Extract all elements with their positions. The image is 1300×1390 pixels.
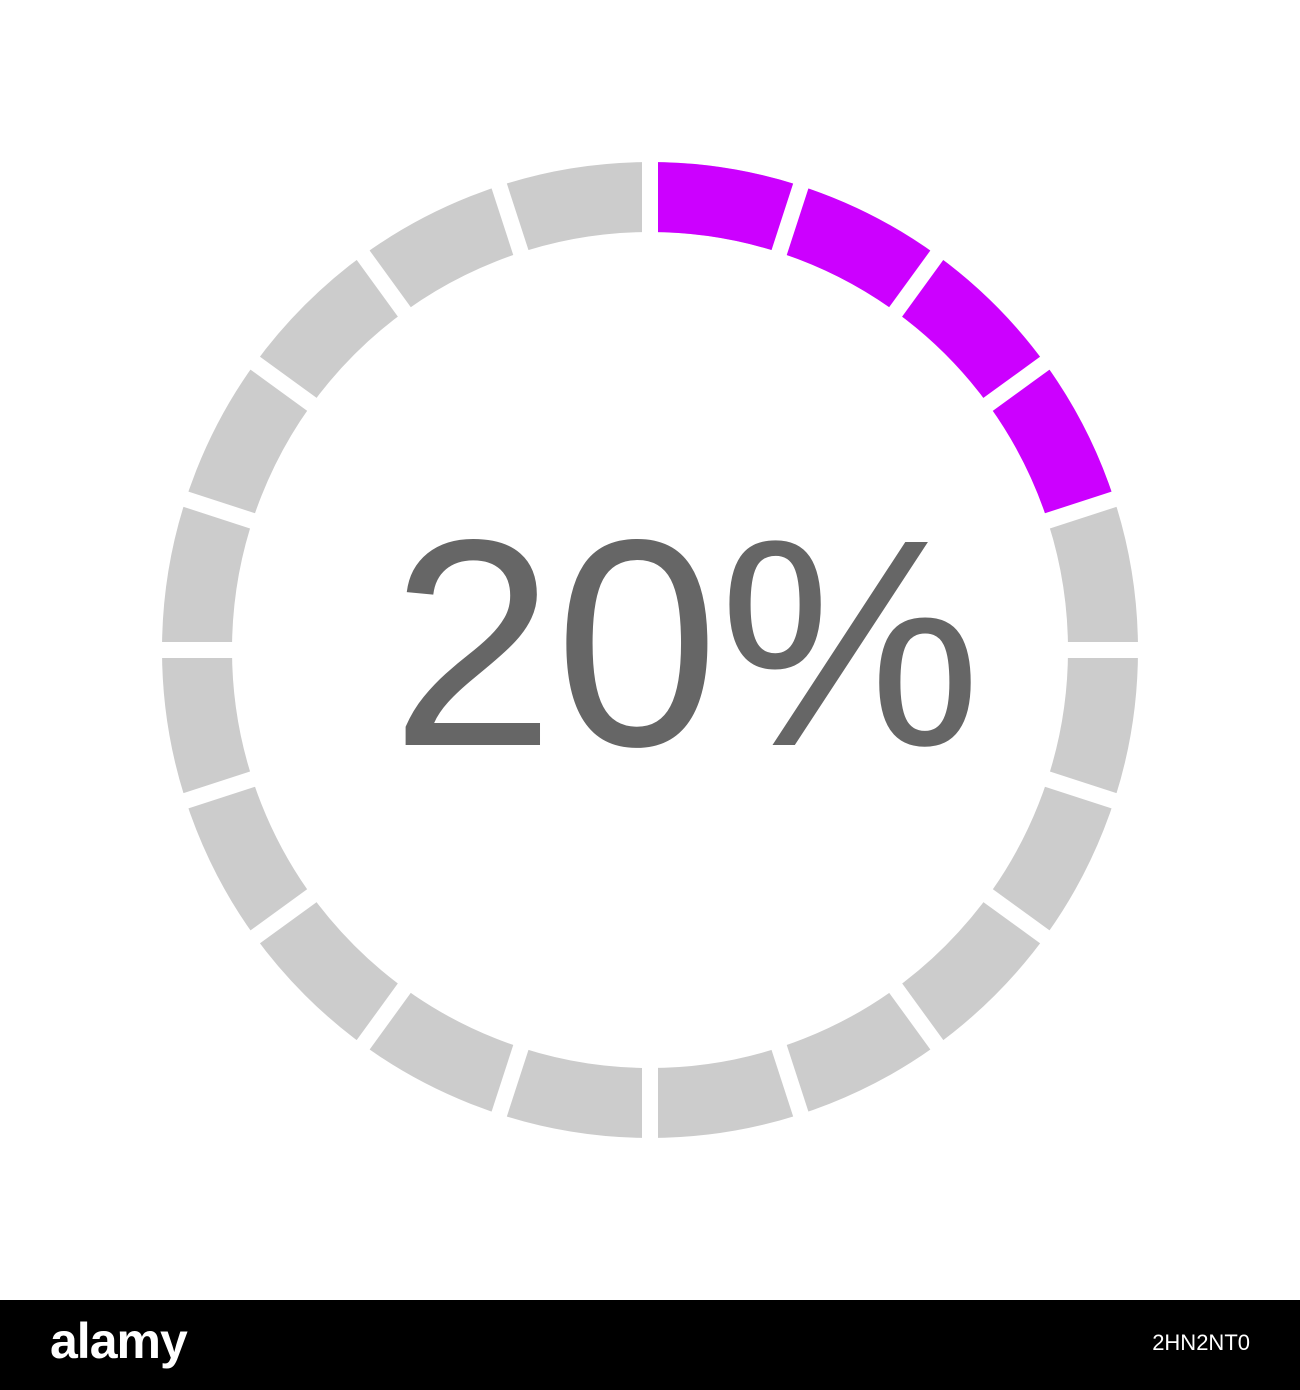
- footer image id: 2HN2NT0: [1152, 1330, 1250, 1355]
- footer logo: alamy: [50, 1313, 187, 1369]
- ring segments: [150, 150, 1150, 1150]
- percentage label: 20%: [391, 478, 981, 808]
- footer bar: [0, 1300, 1300, 1390]
